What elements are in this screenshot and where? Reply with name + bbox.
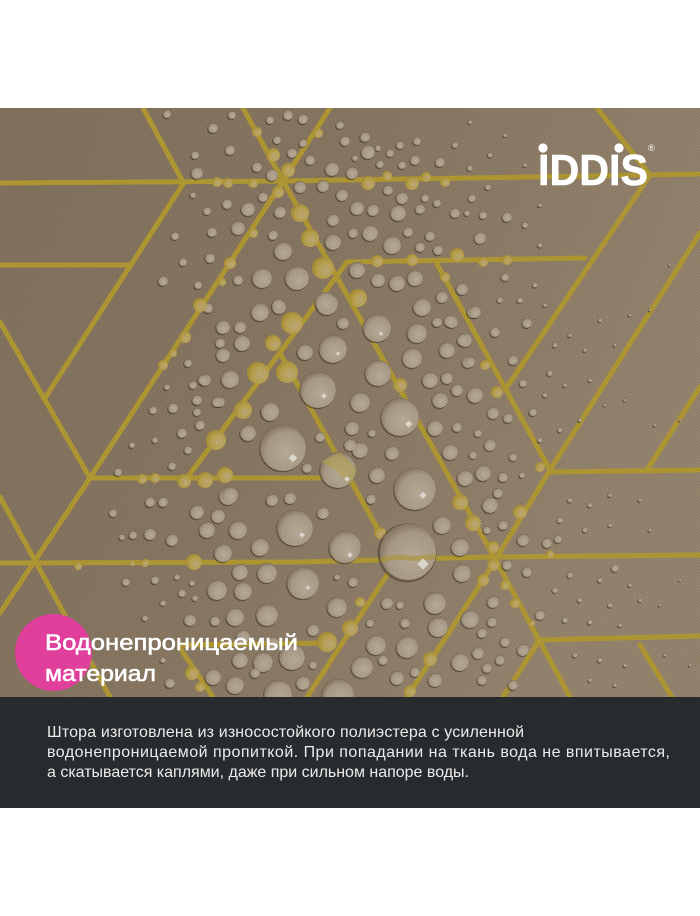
gold-tinted droplets on lines: [74, 127, 554, 697]
description text: а скатывается каплями, даже при сильном напоре воды.: [47, 764, 469, 781]
plain droplets: [109, 110, 692, 711]
fabric weave texture: [0, 108, 700, 697]
logo: IDDIS: ®: [648, 143, 655, 153]
heading: Водонепроницаемый: [45, 630, 298, 655]
description text: Штора изготовлена из износостойкого полиэстера с усиленной: [47, 724, 524, 741]
fabric base: [0, 108, 700, 697]
photo: water beading on patterned fabric: [0, 108, 700, 712]
heading: материал: [45, 661, 156, 686]
droplet shadows: [108, 111, 691, 712]
pink accent circle: [15, 614, 92, 691]
description text: водонепроницаемой пропиткой. При попадании на ткань вода не впитывается,: [47, 744, 670, 761]
logo: IDDIS: IDDIS: [538, 146, 648, 195]
water droplets: [74, 110, 692, 712]
droplet highlights: [289, 332, 429, 590]
heading: [45, 630, 298, 686]
large droplet on line junction: [378, 524, 436, 582]
plain droplet fill: [109, 110, 692, 711]
description text: [47, 724, 670, 781]
gold geometric lines on fabric: [0, 108, 700, 697]
dark description band: [0, 697, 700, 808]
gold band seen through mid droplet: [322, 452, 356, 485]
